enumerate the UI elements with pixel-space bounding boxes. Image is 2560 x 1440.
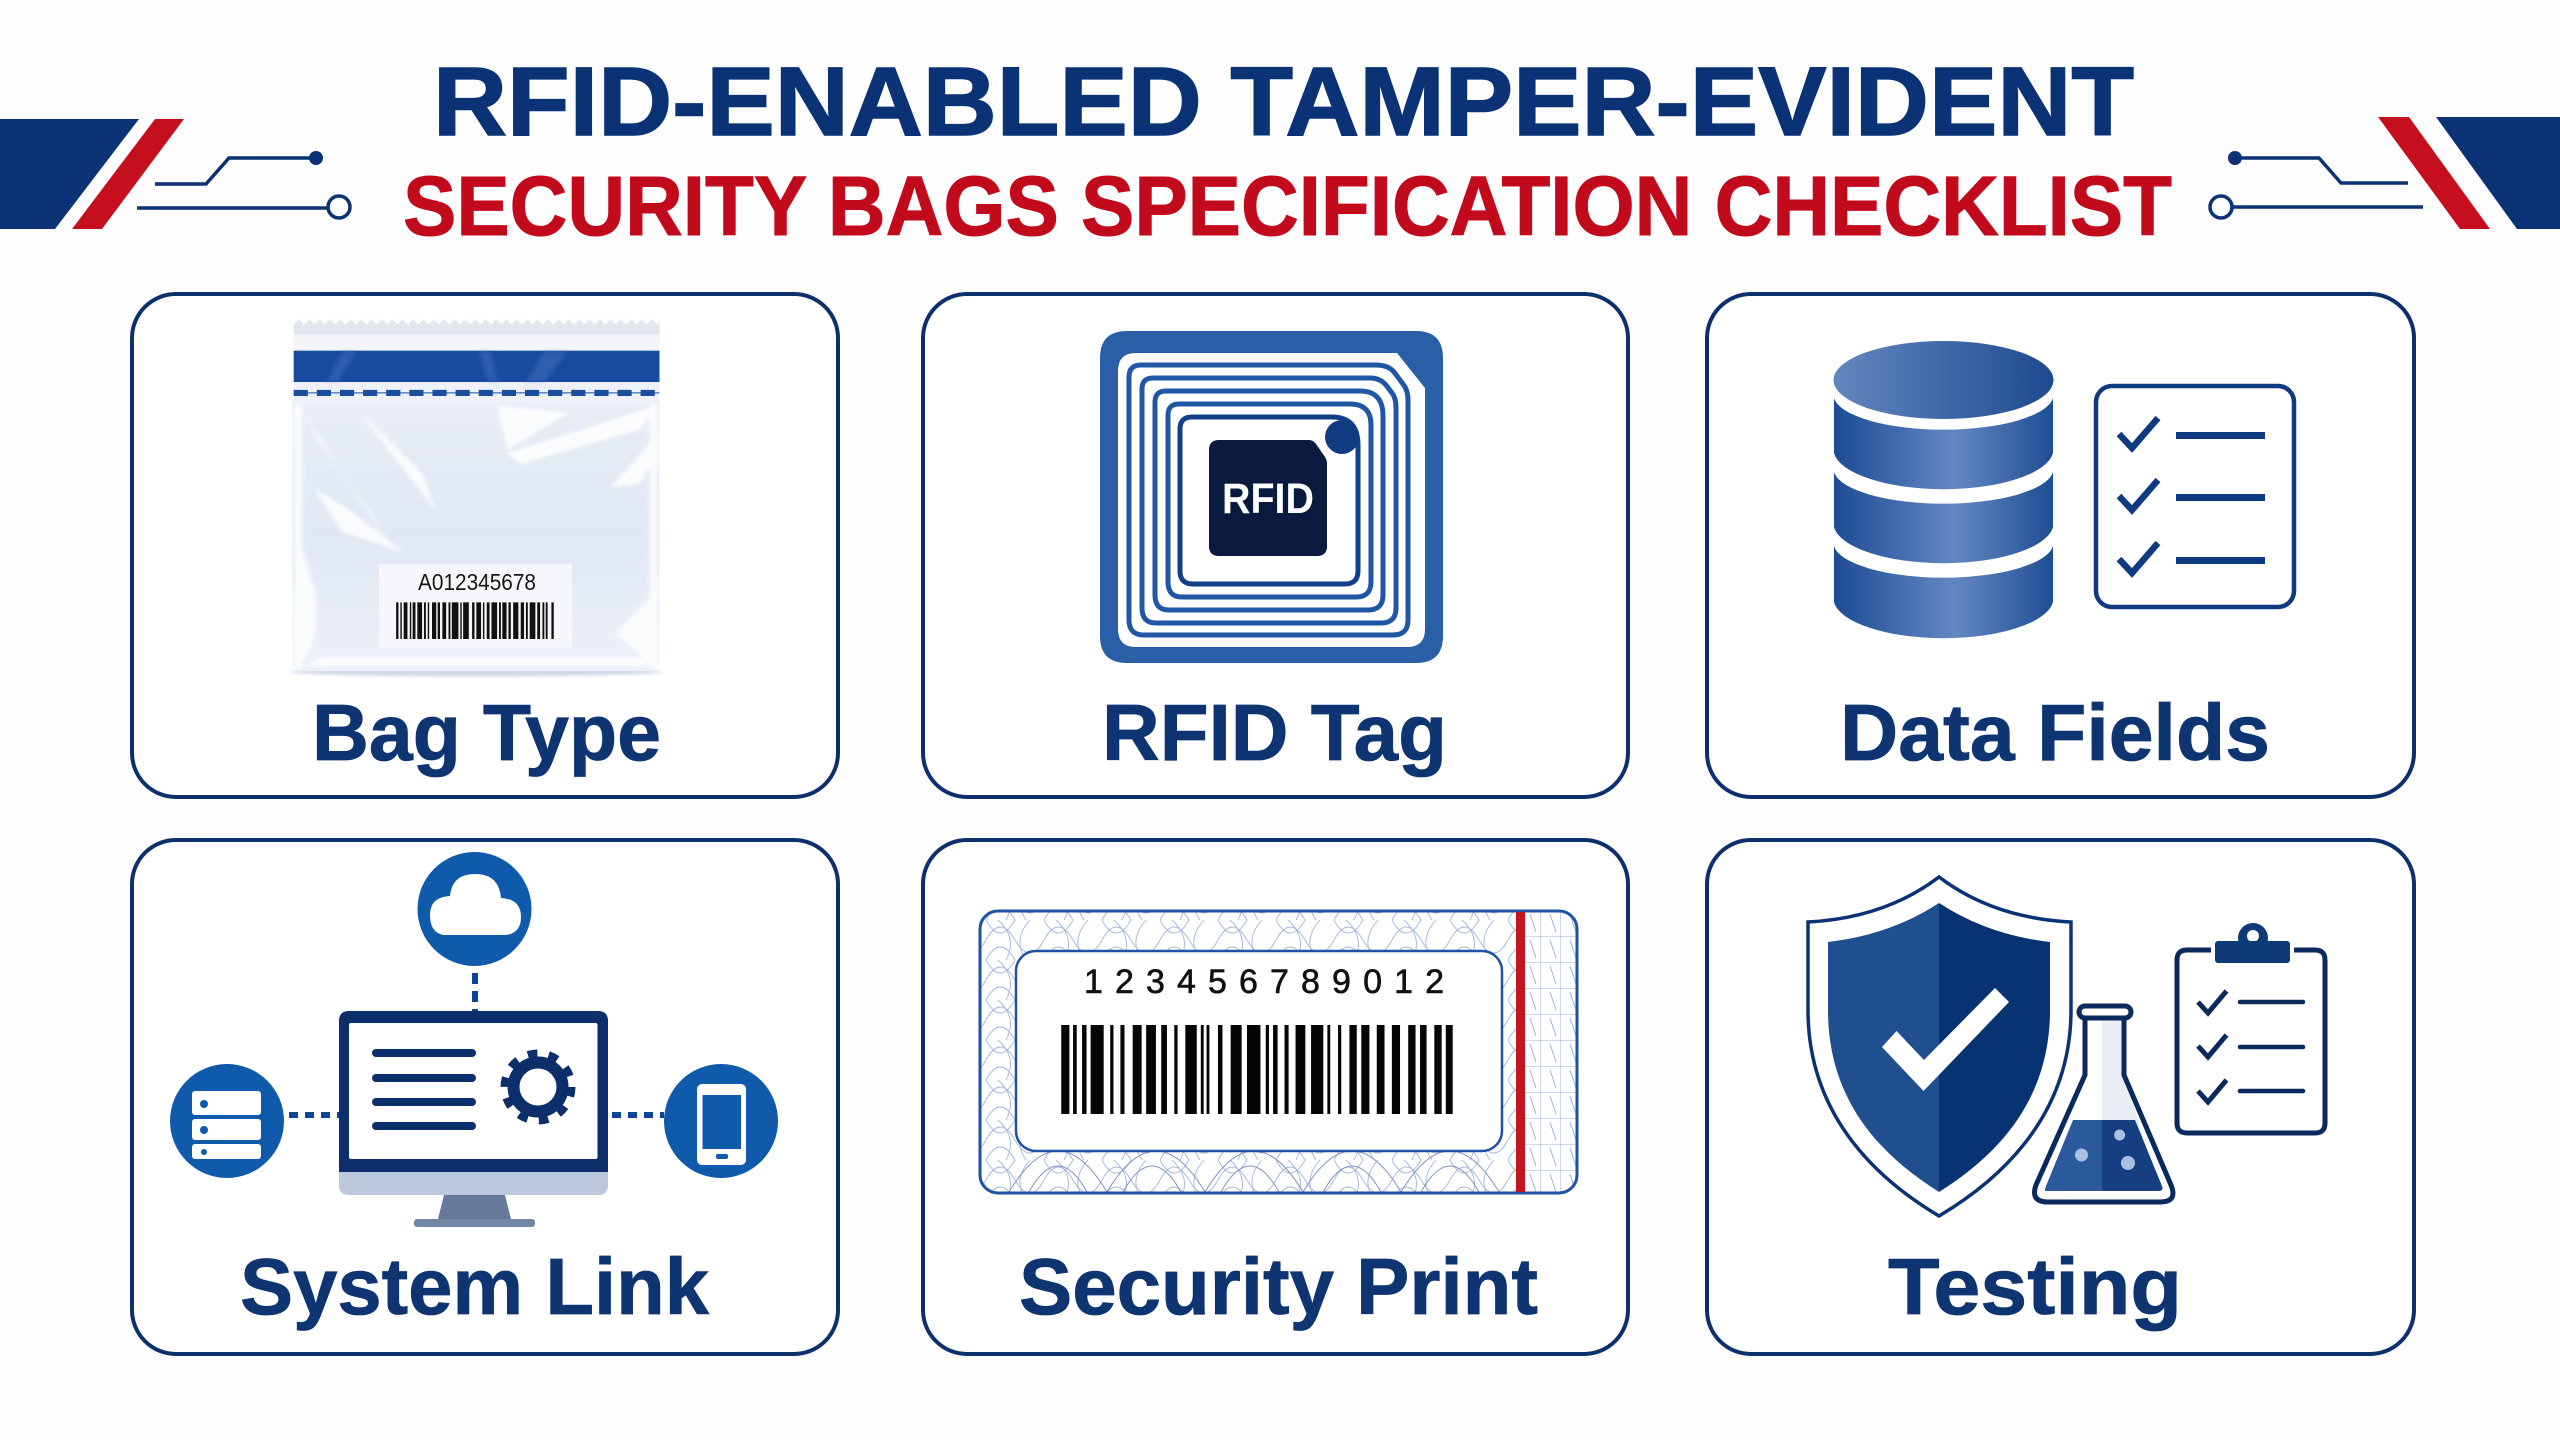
icon: RFID inlay: RFID bbox=[1222, 475, 1314, 523]
title: RFID-ENABLED TAMPER-EVIDENT bbox=[433, 47, 2134, 156]
label: bag type: Bag Type bbox=[312, 688, 661, 777]
icon: cloud bbox=[418, 852, 532, 966]
label: RFID tag: RFID Tag bbox=[1102, 688, 1447, 777]
barcode label bbox=[379, 564, 572, 647]
label: system link: System Link bbox=[240, 1242, 709, 1331]
icon: clipboard bbox=[2177, 923, 2325, 1133]
header banner: left bbox=[0, 119, 350, 229]
panel: system link bbox=[132, 840, 838, 1354]
panel: bag type bbox=[132, 294, 838, 797]
label: security print: Security Print bbox=[1019, 1242, 1538, 1331]
panel: bag type: A012345678 bbox=[418, 569, 536, 595]
icon: RFID inlay bbox=[1100, 331, 1443, 663]
icon: flask bbox=[2034, 1006, 2173, 1202]
icon: server bbox=[170, 1064, 284, 1178]
panel: RFID tag bbox=[923, 294, 1628, 797]
icon: database bbox=[1834, 341, 2054, 638]
label: data fields: Data Fields bbox=[1840, 688, 2270, 777]
subtitle: SECURITY BAGS SPECIFICATION CHECKLIST bbox=[403, 159, 2172, 253]
header banner: right bbox=[2210, 117, 2560, 229]
label: testing: Testing bbox=[1888, 1242, 2182, 1331]
icon: shield bbox=[1808, 877, 2071, 1216]
panel: data fields bbox=[1707, 294, 2414, 797]
icon: checklist bbox=[2096, 386, 2294, 607]
icon: security label bbox=[980, 911, 1577, 1193]
panel: testing bbox=[1707, 840, 2414, 1354]
panel: security print bbox=[923, 840, 1628, 1354]
icon: tamper-evident bag bbox=[290, 319, 663, 676]
icon: smartphone bbox=[664, 1064, 778, 1178]
icon: security label: 123456789012 bbox=[1084, 963, 1444, 1001]
connectors bbox=[289, 973, 664, 1115]
icon: monitor bbox=[339, 1011, 608, 1227]
